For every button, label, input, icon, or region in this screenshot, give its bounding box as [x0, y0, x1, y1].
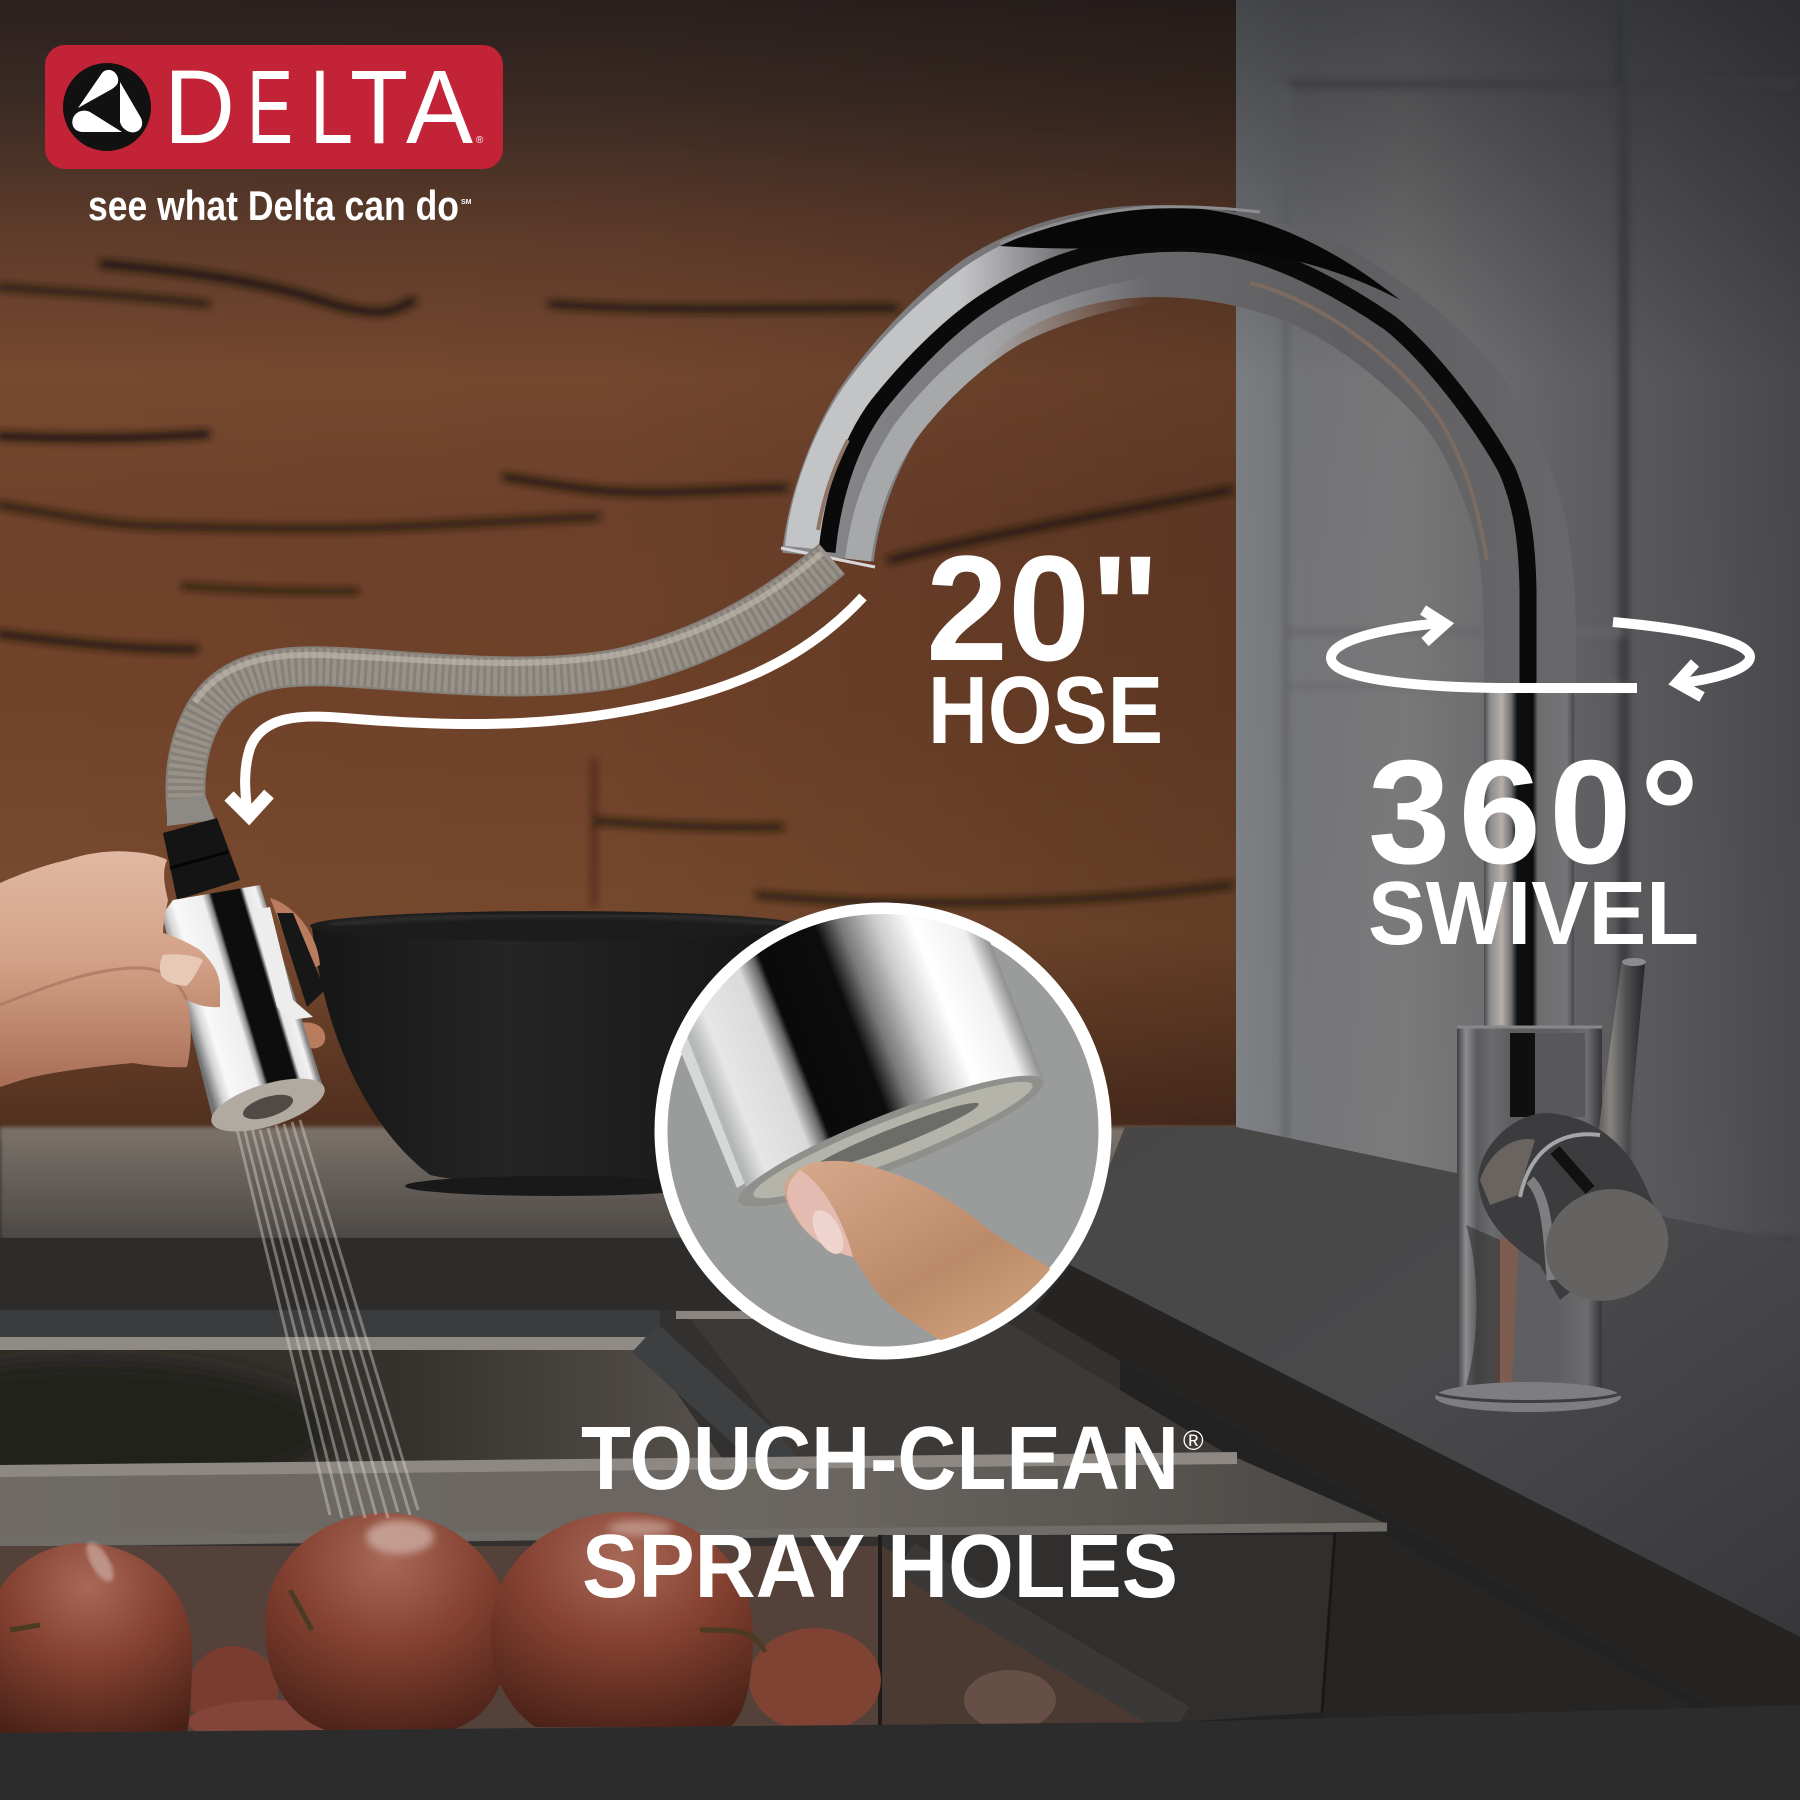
- logo: registered mark: ®: [476, 135, 484, 146]
- faucet riser and base: [1435, 688, 1684, 1412]
- callout: touch-clean zoom circle: [661, 880, 1105, 1353]
- flange: [1435, 1382, 1621, 1412]
- tagline: SM: [461, 199, 472, 206]
- spray head: [162, 795, 331, 1142]
- fingers behind spray head: [270, 898, 325, 1048]
- lever handle: [1592, 960, 1645, 1180]
- zoom: chrome spray face: [681, 914, 1044, 1206]
- grey wall panels: [1236, 0, 1800, 1260]
- handle body: [1478, 1113, 1660, 1300]
- front rim: [0, 1458, 1387, 1547]
- logo: red plate: [45, 45, 503, 169]
- logo: wordmark: E: [247, 49, 293, 166]
- logo: wordmark: T: [350, 49, 408, 166]
- callout text: touch-clean spray holes: ®: [1183, 1425, 1204, 1456]
- water spray: [236, 1120, 418, 1518]
- callout text: 20 inch hose: 20": [926, 524, 1160, 692]
- front edge of sink: [0, 1705, 1800, 1800]
- apples: [0, 1512, 1056, 1744]
- callout text: 20 inch hose: [926, 524, 1163, 764]
- left basin wall: [0, 1350, 730, 1470]
- zoom: fingertip touching holes: [784, 1160, 1050, 1340]
- lower basin panels: [0, 1546, 880, 1733]
- logo: wordmark: A: [406, 49, 473, 166]
- second basin: [690, 1318, 1240, 1462]
- logo: wordmark: [164, 49, 473, 166]
- upper left silver: [806, 242, 1065, 548]
- braided hose: [185, 553, 832, 815]
- logo: wordmark: D: [164, 49, 235, 166]
- faucet spout: [781, 207, 1530, 690]
- callout text: touch-clean spray holes: [581, 1409, 1204, 1617]
- lower left silver: [858, 290, 1150, 560]
- outer edge lines: [1000, 207, 1260, 243]
- handle end cap: [1530, 1172, 1684, 1318]
- riser tube: [1484, 688, 1574, 1028]
- logo: white triangle lobes: [72, 70, 142, 132]
- callout text: touch-clean spray holes: SPRAY HOLES: [582, 1517, 1178, 1617]
- counter front edge: [1034, 1265, 1800, 1760]
- hand holding spray head: [0, 851, 220, 1087]
- black bowl: [310, 911, 800, 1196]
- logo: Delta badge: [45, 45, 503, 169]
- copper reflection: [1250, 283, 1487, 560]
- logo: black circle: [63, 63, 151, 151]
- callout text: 20 inch hose: HOSE: [928, 657, 1163, 764]
- black band: [827, 243, 1528, 690]
- callout text: 360 swivel: SWIVEL: [1368, 864, 1699, 964]
- wood backsplash: [0, 0, 1236, 1140]
- black top reflection: [1000, 207, 1400, 300]
- arrow: 360 swivel rotation: [1331, 610, 1750, 697]
- arrow: hose extension: [229, 597, 863, 816]
- counter and sink: [0, 1127, 1800, 1800]
- logo: wordmark: L: [310, 49, 353, 166]
- spout base metal: [828, 251, 1530, 690]
- right countertop: [1070, 1127, 1800, 1637]
- collar: [1457, 1027, 1602, 1387]
- tagline: see what Delta can do: [88, 182, 459, 229]
- callout text: 360 swivel: 360°: [1368, 730, 1699, 895]
- callout text: touch-clean spray holes: TOUCH-CLEAN: [581, 1409, 1179, 1509]
- nozzle lip: [781, 548, 875, 567]
